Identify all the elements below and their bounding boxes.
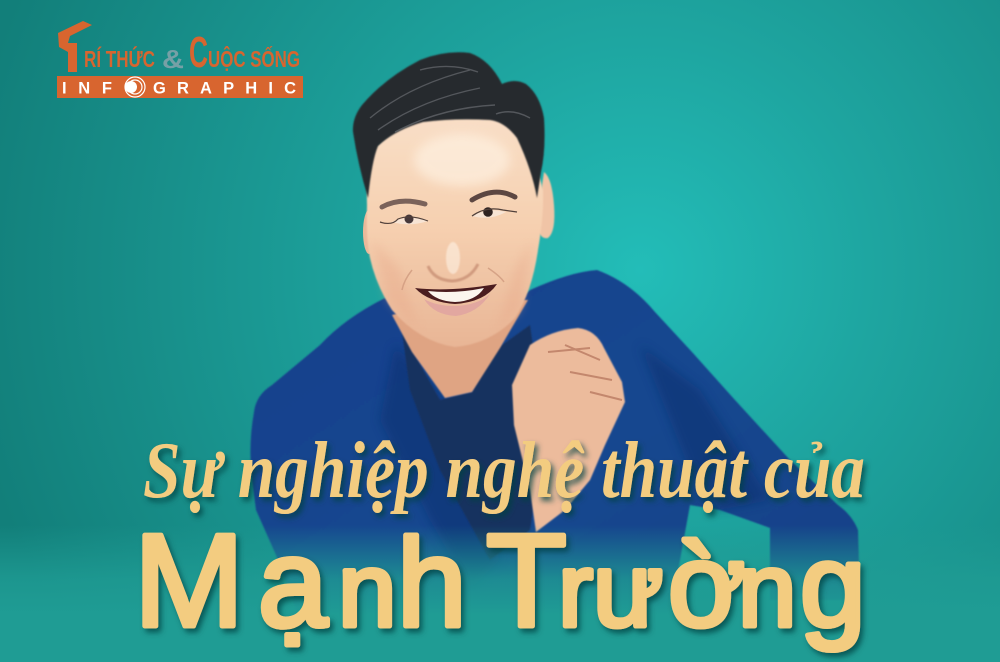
smile lines xyxy=(402,268,504,290)
hair xyxy=(353,52,545,198)
title: h xyxy=(397,514,467,653)
title: M xyxy=(134,507,244,654)
right eye xyxy=(472,207,517,218)
face xyxy=(367,105,543,347)
title: g xyxy=(800,520,866,652)
bottom fade over the photo xyxy=(0,525,1000,615)
jacket xyxy=(250,270,860,662)
finger lines xyxy=(548,345,622,400)
left eyebrow xyxy=(382,201,425,207)
bottom solid band xyxy=(0,615,1000,662)
title: r xyxy=(558,532,593,649)
hand and wrist xyxy=(512,328,625,532)
logo T mark xyxy=(58,21,92,72)
logo words: Tri Thuc: RÍ THỨC xyxy=(84,45,155,72)
title: T xyxy=(486,507,567,654)
subtitle: Sự nghiệp nghệ thuật của xyxy=(143,427,865,515)
mouth xyxy=(415,284,497,304)
neck xyxy=(392,300,528,398)
left eye xyxy=(380,214,428,224)
logo bar xyxy=(57,76,303,98)
logo bar ring icon xyxy=(125,77,145,97)
title: ư xyxy=(593,532,663,649)
logo words: uoc song: UỘC SỐNG xyxy=(208,45,300,72)
right eyebrow xyxy=(472,192,515,200)
forehead highlight xyxy=(414,134,510,186)
logo bar text continued: GRAPHIC xyxy=(153,80,296,98)
nose xyxy=(428,264,478,281)
title: n xyxy=(338,532,396,649)
title: n xyxy=(738,532,796,649)
teeth xyxy=(428,288,484,302)
lower lip xyxy=(424,294,490,316)
ear right xyxy=(536,172,554,238)
ear left xyxy=(363,210,375,254)
logo words: Cuoc: C xyxy=(189,28,208,77)
logo: Tri Thuc & Cuoc Song Infographic xyxy=(57,21,303,98)
logo ampersand: & xyxy=(162,44,184,74)
cheek shading xyxy=(372,240,532,335)
jacket shading xyxy=(380,345,770,590)
title: ờ xyxy=(668,520,745,652)
portrait photo of the actor xyxy=(250,52,860,662)
hair highlights xyxy=(370,66,530,132)
title: ạ xyxy=(258,514,328,653)
logo bar text: INF xyxy=(62,80,112,98)
shirt xyxy=(402,325,545,560)
